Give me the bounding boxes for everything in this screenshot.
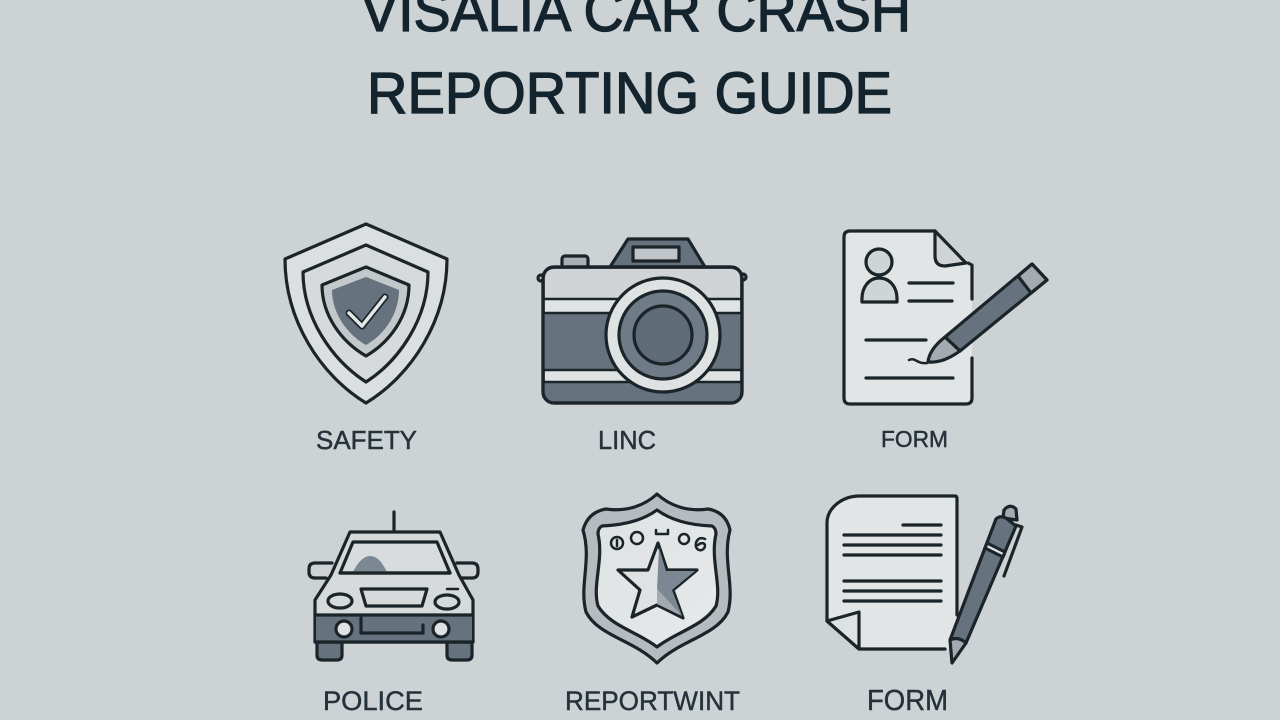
title [361, 0, 911, 126]
icon: signed form with pen [844, 231, 1047, 404]
icon: document with pen [827, 496, 1022, 663]
label: form second: FORM [867, 685, 948, 717]
title: REPORTING GUIDE [367, 61, 892, 126]
icon: police badge [583, 494, 730, 663]
label: linc: LINC [598, 425, 656, 455]
label: form: FORM [881, 426, 948, 452]
label: safety: SAFETY [316, 425, 417, 455]
icon: camera [538, 239, 746, 403]
label: reportwint: REPORTWINT [565, 686, 740, 716]
label: police: POLICE [323, 686, 423, 716]
icon: safety shield [285, 224, 447, 403]
icon: police car [309, 512, 478, 660]
